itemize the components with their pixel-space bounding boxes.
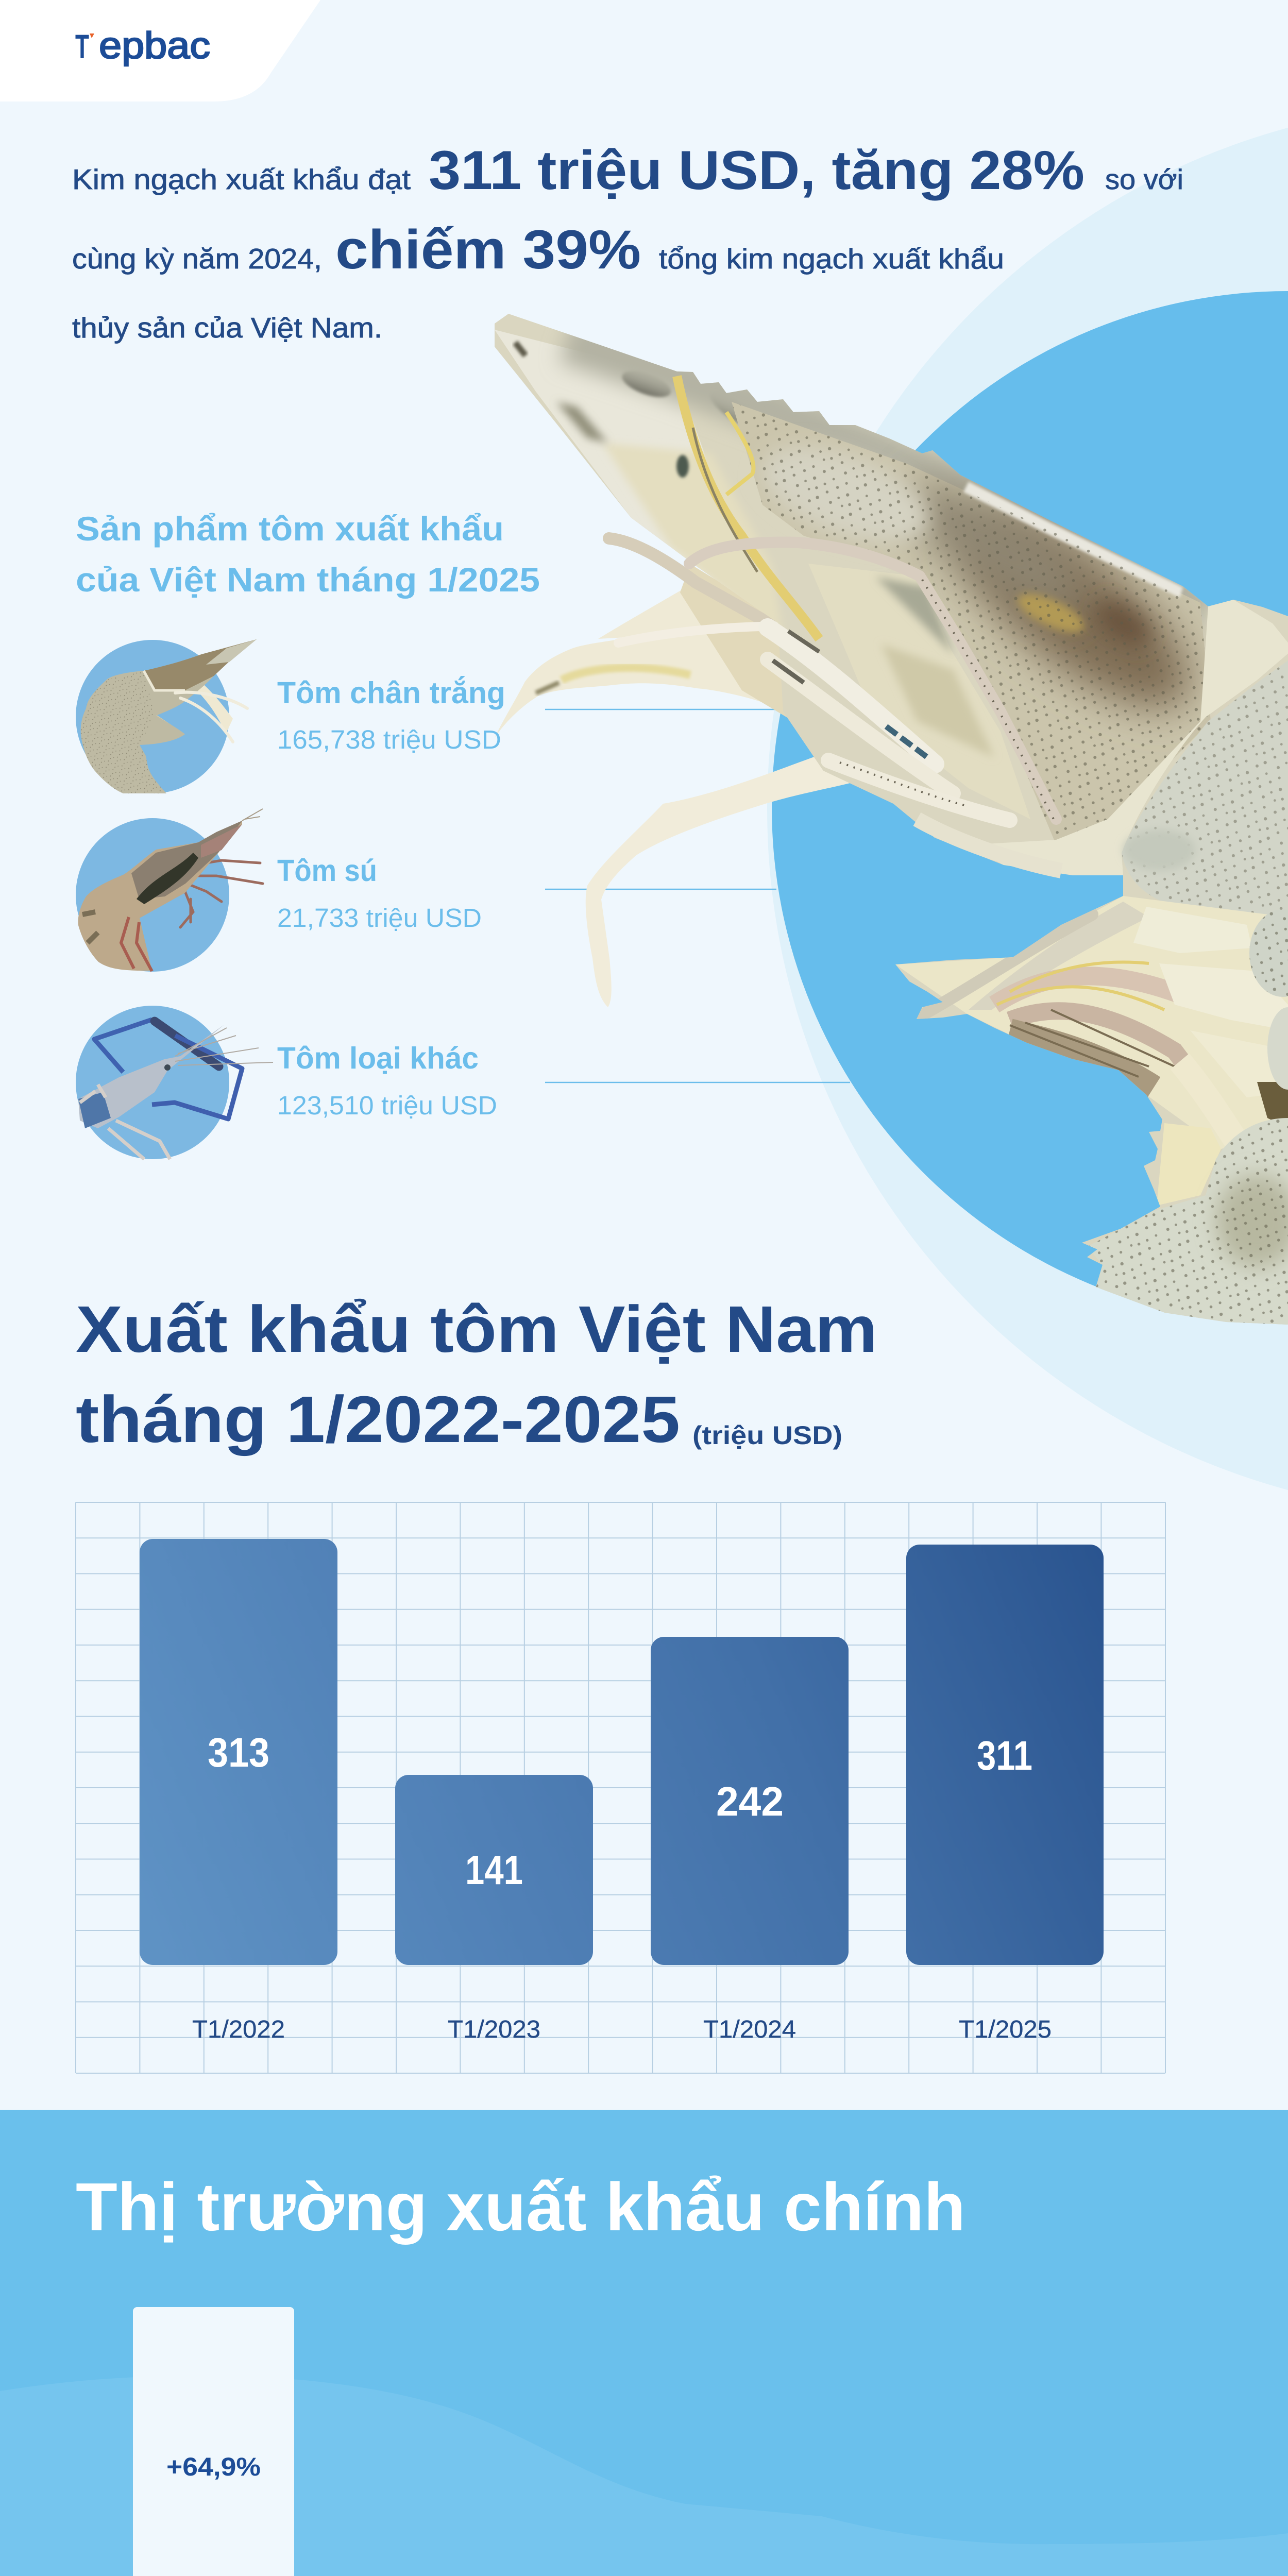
label: black tiger shrimp: Tôm sú <box>277 854 377 888</box>
tail segments <box>1087 1118 1288 1329</box>
product: black tiger shrimp <box>76 809 482 972</box>
third maxilliped leg <box>689 543 1056 819</box>
bar values: 311 <box>977 1733 1032 1778</box>
bar: T1/2023 <box>395 1775 593 1965</box>
axis labels: T1/2025 <box>959 2016 1052 2043</box>
axis labels: T1/2023 <box>448 2016 540 2043</box>
leg base fill <box>680 564 793 721</box>
bar values: 141 <box>465 1847 523 1893</box>
icon: giant river prawn <box>78 1020 273 1159</box>
heading: main markets: Thị trường xuất khẩu chính <box>76 2169 965 2245</box>
section heading: products: của Việt Nam tháng 1/2025 <box>76 561 540 599</box>
gill panel <box>892 573 916 581</box>
section heading: products: Sản phẩm tôm xuất khẩu <box>76 510 504 548</box>
panel: blue markets section <box>0 2110 1288 2576</box>
chart heading: tháng 1/2022-2025 <box>76 1383 680 1456</box>
market chart <box>75 2307 1213 2576</box>
label: white-leg shrimp: Tôm chân trắng <box>277 676 505 710</box>
intro text block: chiếm 39% <box>335 218 641 280</box>
bar chart: exports 2022-2025 <box>76 1502 1165 2073</box>
yellow antennal scale <box>677 376 819 639</box>
intro text block: Kim ngạch xuất khẩu đạt <box>72 163 411 195</box>
head and body silhouette <box>489 309 1288 1340</box>
thoracic segment <box>1179 697 1240 758</box>
intro text block <box>72 139 1183 344</box>
bar values: 242 <box>716 1778 784 1824</box>
axis labels: T1/2024 <box>703 2016 796 2043</box>
value: other shrimp: 123,510 triệu USD <box>277 1091 497 1120</box>
label: other shrimp: Tôm loại khác <box>277 1041 479 1075</box>
intro text block: cùng kỳ năm 2024, <box>72 243 322 275</box>
bar values <box>208 1730 1032 1893</box>
chart heading: Xuất khẩu tôm Việt Nam <box>76 1293 877 1366</box>
section heading: products <box>76 510 540 599</box>
white walking legs <box>768 628 935 764</box>
bar: T1/2025 <box>906 1545 1104 1965</box>
bar values: 313 <box>208 1730 269 1775</box>
axis labels <box>192 2016 1052 2043</box>
value: black tiger shrimp: 21,733 triệu USD <box>277 903 482 933</box>
feathered appendage <box>495 590 824 738</box>
value: white-leg shrimp: 165,738 triệu USD <box>277 725 501 754</box>
swimmerets base <box>895 896 1288 1149</box>
product: white-leg shrimp <box>76 639 505 793</box>
bar: China and Hong Kong: +64,9% <box>166 2452 261 2481</box>
intro text block: so với <box>1105 163 1183 195</box>
bar: T1/2022 <box>140 1539 337 1965</box>
bar: T1/2024 <box>651 1637 849 1965</box>
hero shrimp illustration <box>489 309 1288 1340</box>
logo: Tepbac: T <box>75 27 89 65</box>
product leader lines <box>545 709 850 1082</box>
decorative wave <box>0 2376 1288 2576</box>
side blobs <box>1249 909 1288 997</box>
axis labels: T1/2022 <box>192 2016 285 2043</box>
intro text block: tổng kim ngạch xuất khẩu <box>659 243 1004 275</box>
logo: Tepbac: epbac <box>99 25 210 66</box>
icon: black tiger shrimp <box>78 809 263 971</box>
header logo tab <box>0 0 320 101</box>
icon: white-leg shrimp <box>81 639 257 793</box>
product: other shrimp <box>76 1006 497 1159</box>
decorative light circle <box>767 103 1288 1515</box>
carapace <box>732 402 1211 845</box>
bent long leg <box>586 753 850 1007</box>
intro text block: 311 triệu USD, tăng 28% <box>429 139 1084 201</box>
rostrum pale face <box>495 330 730 589</box>
chart heading <box>76 1293 877 1456</box>
chart heading: (triệu USD) <box>692 1421 842 1450</box>
cream shell edge <box>969 600 1288 876</box>
intro text block: thủy sản của Việt Nam. <box>72 312 382 344</box>
top ridge shell <box>567 340 1206 613</box>
antennule <box>609 538 783 631</box>
bar: China and Hong Kong <box>133 2307 294 2576</box>
decorative blue circle <box>772 291 1288 1324</box>
